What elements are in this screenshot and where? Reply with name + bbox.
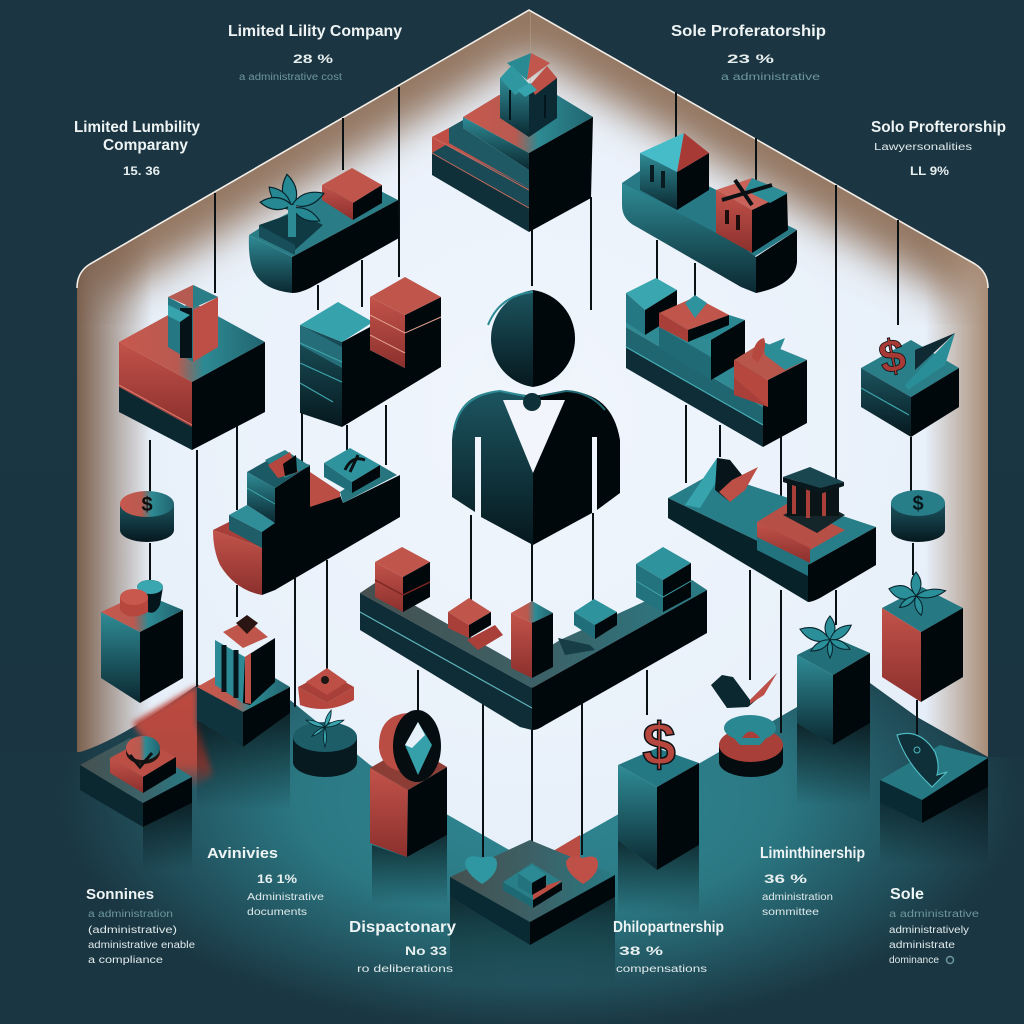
icon: ring	[379, 710, 441, 782]
label: limitedinership: 36 %	[764, 872, 808, 886]
label: limited liability company top: Limited Lility Company	[228, 23, 402, 40]
block: round teal base with flower	[293, 709, 357, 777]
red cube with small teal cube	[659, 295, 729, 342]
icon: leaves	[887, 572, 946, 616]
red cube on capsule	[322, 168, 382, 220]
label: limited liability company left: Comparany	[103, 137, 188, 154]
red floor patch left	[132, 685, 213, 790]
block: left centre stepped platform with red hull	[213, 448, 400, 595]
label: activities: Avinivies	[207, 845, 278, 862]
label: limitedinership: Liminthinership	[760, 845, 865, 862]
label: dhilospartnership: Dhilopartnership	[613, 919, 724, 936]
label: sole proprietorship right: LL 9%	[910, 164, 949, 178]
label: dispactonary	[349, 919, 456, 975]
person icon	[452, 286, 620, 545]
label: sole proprietorship top	[671, 23, 826, 83]
label: sole: Sole	[890, 886, 924, 903]
block: top centre stepped box with gift	[432, 53, 593, 232]
tall gift	[215, 615, 275, 705]
icon: temple	[783, 467, 845, 533]
label: sole: dominance	[889, 955, 939, 966]
label: sole: administrate	[889, 940, 956, 951]
label: limited liability company left	[74, 119, 200, 178]
block: right dollar box	[861, 328, 959, 437]
bow	[523, 393, 541, 411]
red floor patch centre	[533, 835, 580, 880]
teal cube	[626, 278, 677, 335]
label: dhilospartnership: 38 %	[619, 944, 664, 958]
icon: house red	[716, 178, 788, 253]
floor shadows	[143, 713, 988, 985]
shirt collar	[503, 400, 565, 473]
label: activities: 16 1%	[257, 872, 297, 886]
label: activities	[207, 845, 325, 918]
block: bottom centre platform with hearts	[450, 840, 615, 945]
icon: teal heart	[465, 856, 497, 884]
block: upper left capsule with plant and red cube	[249, 168, 399, 293]
red box	[110, 736, 176, 793]
red hull	[213, 530, 262, 595]
teal plate	[340, 465, 397, 503]
red wedge	[310, 472, 340, 507]
head	[481, 286, 585, 390]
icon: flower	[306, 709, 344, 747]
label: sole proprietorship right	[871, 119, 1006, 178]
connector poles	[150, 87, 917, 865]
icon: leaves	[798, 616, 854, 658]
red gift	[734, 338, 807, 407]
block: bottom right platform with fish	[880, 733, 988, 823]
small teal cube	[324, 448, 380, 493]
teal double cube	[636, 547, 691, 612]
block: teal and red stack centre left	[300, 277, 441, 427]
teal wedge	[558, 638, 595, 655]
block: right stepped platform with cubes and gift	[626, 278, 807, 447]
label: sole	[889, 886, 980, 966]
label: limitedinership: administration	[762, 892, 833, 903]
label: limited liability company left: 15. 36	[123, 164, 160, 178]
block: coin dollar left: $	[141, 494, 153, 516]
jacket	[452, 391, 620, 545]
block: coin dollar right	[891, 490, 945, 542]
block: upper right capsule with houses	[622, 133, 797, 293]
upper stack	[247, 455, 310, 488]
label: sonnines: (administrative)	[88, 925, 177, 936]
block: cylinder with dome	[719, 715, 783, 777]
small gift	[265, 450, 310, 478]
icon: house teal	[640, 133, 709, 210]
room walls	[70, 0, 1000, 880]
block: red pillar right with leaf	[882, 572, 963, 702]
block: coin dollar left	[120, 491, 174, 542]
label: activities: Administrative	[247, 892, 325, 903]
icon: fish	[897, 733, 947, 787]
label: limitedinership: sommittee	[762, 907, 820, 918]
block: long central platform	[360, 547, 707, 730]
label: sonnines: a administration	[88, 909, 173, 920]
label: limited liability company top: a administrative cost	[239, 72, 342, 83]
gift on left box	[168, 285, 218, 362]
icon: checkmark floating	[711, 673, 777, 708]
label: sonnines: a compliance	[88, 955, 164, 966]
block: teal pillar with dollar sign	[618, 711, 699, 870]
icon: check marks	[685, 458, 758, 508]
label: sole: administratively	[889, 925, 969, 936]
block: red dish with eye	[298, 668, 354, 709]
label: sole proprietorship right: Lawyersonalities	[874, 142, 972, 153]
stepped cube	[503, 863, 562, 908]
label: dispactonary: ro deliberations	[357, 964, 453, 975]
teal block	[659, 315, 745, 380]
label: dispactonary: No 33	[405, 944, 447, 958]
label: sole proprietorship top: 23 %	[727, 52, 775, 66]
label: sole proprietorship top: a administrative	[721, 72, 821, 83]
block: red pillar with ring	[370, 710, 447, 857]
block: coin dollar right: $	[912, 493, 924, 515]
label: dispactonary: Dispactonary	[349, 919, 456, 936]
label: sonnines: Sonnines	[86, 886, 154, 903]
block: plinth with tall gift	[197, 615, 290, 747]
label: limited liability company left: Limited Lumbility	[74, 119, 200, 136]
small teal cube	[574, 599, 617, 639]
wall top edge highlight	[77, 10, 988, 288]
block: teal pillar right with leaf	[797, 616, 870, 745]
label: dhilospartnership	[613, 919, 724, 975]
central column	[511, 601, 553, 678]
label: limited liability company top: 28 %	[293, 52, 333, 66]
small red cube	[448, 598, 503, 650]
icon: plant	[259, 173, 326, 255]
block: bottom left platform with red box	[80, 736, 192, 827]
red double cube	[375, 547, 430, 612]
gift on top centre	[500, 53, 557, 137]
floor	[0, 683, 1024, 1024]
label: activities: documents	[247, 907, 307, 918]
label: sole proprietorship top: Sole Proferatorship	[671, 23, 826, 40]
icon: dollar: $	[642, 711, 676, 778]
label: sole: a administrative	[889, 909, 980, 920]
block: right platform with temple	[668, 458, 876, 602]
label: dhilospartnership: compensations	[616, 964, 707, 975]
label: sonnines	[86, 886, 195, 966]
label: limitedinership	[760, 845, 865, 918]
label: limited liability company top	[228, 23, 402, 83]
teal step	[229, 505, 275, 532]
label: sonnines: administrative enable	[88, 940, 195, 951]
icon: dollar arrow: $	[874, 328, 910, 384]
block: left red and teal box with gift	[119, 285, 265, 450]
icon: cups	[120, 580, 163, 617]
icon: red heart	[566, 856, 598, 884]
block: left cube with red and teal cylinders	[101, 580, 183, 703]
label: sole proprietorship right: Solo Profterorship	[871, 119, 1006, 136]
